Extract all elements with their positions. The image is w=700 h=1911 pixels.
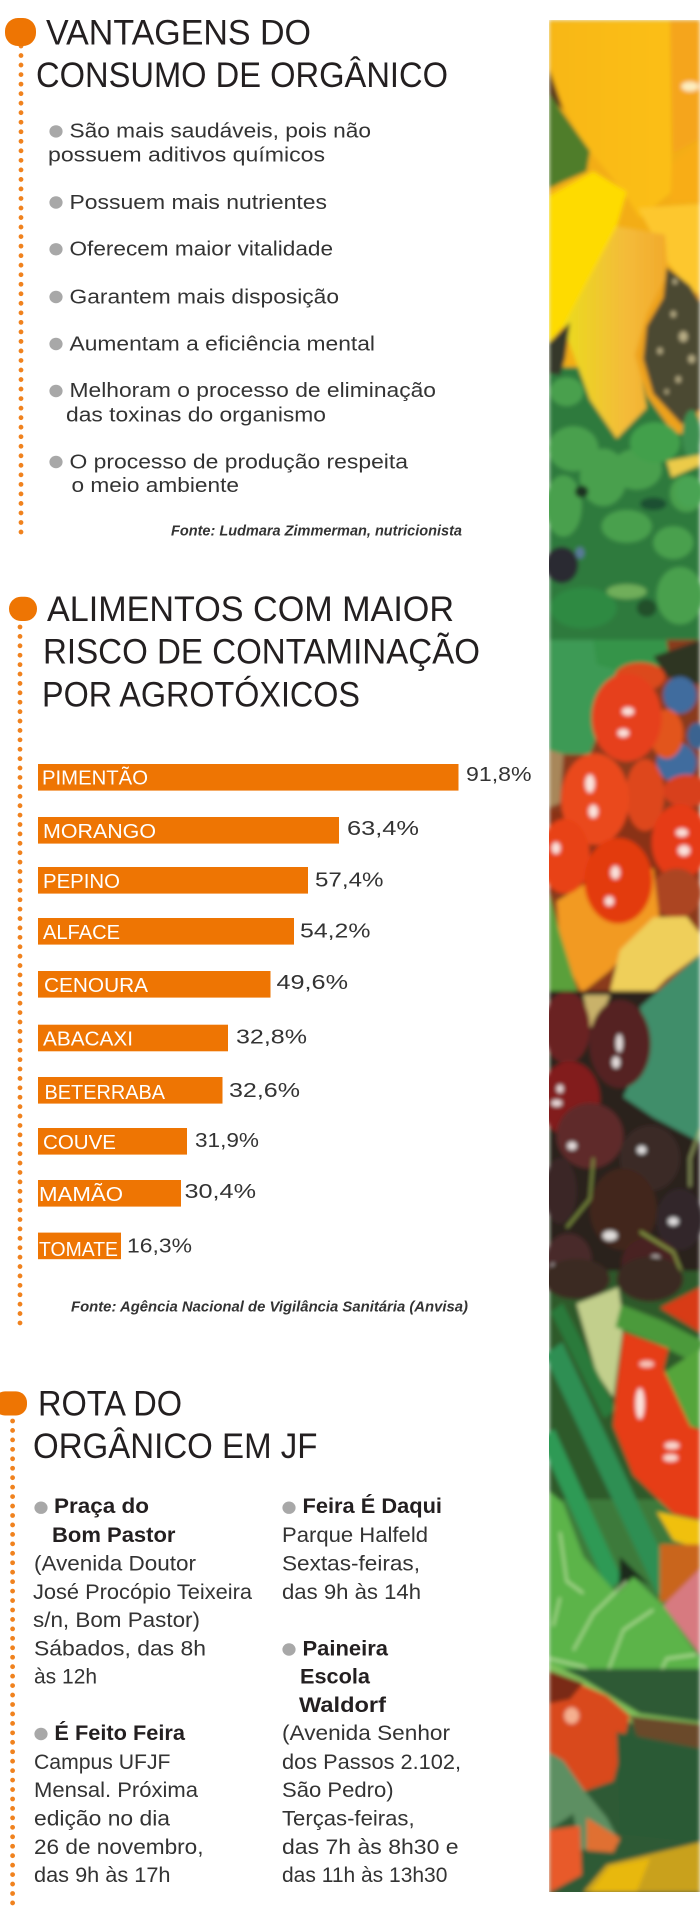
location: praça do bom pastor: s/n, Bom Pastor) xyxy=(33,1609,200,1632)
location: paineira escola waldorf xyxy=(282,1637,461,1887)
bullet list of advantages: Aumentam a eficiência mental xyxy=(70,333,375,356)
section: alimentos com maior risco de contaminação xyxy=(9,590,532,1326)
bar: cenoura: 49,6% xyxy=(276,972,348,994)
bar: couve: COUVE xyxy=(43,1131,116,1154)
bar: pepino xyxy=(38,867,384,894)
location: é feito feira: das 9h às 17h xyxy=(34,1864,171,1887)
bar: morango xyxy=(38,817,419,844)
orange blob marker xyxy=(5,18,36,46)
orange blob marker xyxy=(9,597,37,621)
bar: pimentão: 91,8% xyxy=(466,764,532,786)
bullet list of advantages: Possuem mais nutrientes xyxy=(70,191,327,214)
bar: couve xyxy=(38,1128,259,1155)
location: paineira escola waldorf: Terças-feiras, xyxy=(282,1808,415,1830)
location: paineira escola waldorf: Paineira xyxy=(302,1637,388,1660)
location: feira é daqui: das 9h às 14h xyxy=(282,1581,421,1604)
location: paineira escola waldorf: Escola xyxy=(300,1666,370,1689)
bar: beterraba xyxy=(38,1077,300,1104)
heading: CONSUMO DE ORGÂNICO xyxy=(36,56,448,95)
bullet list of advantages: Oferecem maior vitalidade xyxy=(70,237,333,260)
heading: ORGÂNICO EM JF xyxy=(33,1427,318,1466)
location: é feito feira: Mensal. Próxima xyxy=(34,1779,198,1802)
bar chart xyxy=(38,764,532,1261)
location: praça do bom pastor: Praça do xyxy=(54,1495,149,1518)
location: é feito feira: É Feito Feira xyxy=(54,1722,185,1745)
bullet list of advantages: São mais saudáveis, pois não xyxy=(70,120,371,142)
source note: Fonte: Ludmara Zimmerman, nutricionista xyxy=(171,523,462,540)
heading: POR AGROTÓXICOS xyxy=(42,676,360,715)
heading: ALIMENTOS COM MAIOR xyxy=(47,590,454,629)
bullet list of advantages: das toxinas do organismo xyxy=(66,403,326,426)
location: é feito feira: edição no dia xyxy=(34,1808,170,1830)
bar: morango: MORANGO xyxy=(43,820,156,843)
photo: fruits and vegetables column xyxy=(540,20,700,1897)
heading xyxy=(33,1384,318,1466)
heading xyxy=(36,14,448,95)
bar: abacaxi: ABACAXI xyxy=(43,1028,133,1050)
orange blob marker xyxy=(0,1391,27,1416)
location: praça do bom pastor xyxy=(33,1495,252,1689)
bar: cenoura xyxy=(38,971,348,998)
location: paineira escola waldorf: São Pedro) xyxy=(282,1779,394,1802)
location: praça do bom pastor: Bom Pastor xyxy=(52,1524,176,1547)
location: feira é daqui: Parque Halfeld xyxy=(282,1524,428,1547)
bar: tomate: 16,3% xyxy=(127,1236,192,1258)
location: paineira escola waldorf: dos Passos 2.102, xyxy=(282,1751,461,1774)
location: praça do bom pastor: (Avenida Doutor xyxy=(34,1552,196,1576)
bar: mamão: MAMÃO xyxy=(39,1183,123,1206)
dotted line xyxy=(10,1421,15,1908)
source note: Fonte: Agência Nacional de Vigilância Sanitária (Anvisa) xyxy=(71,1299,468,1316)
location: é feito feira xyxy=(34,1722,204,1887)
bar: cenoura: CENOURA xyxy=(44,974,148,997)
location: praça do bom pastor: Sábados, das 8h xyxy=(34,1637,206,1660)
bullet list of advantages: o meio ambiente xyxy=(72,474,239,497)
location: é feito feira: Campus UFJF xyxy=(34,1751,170,1774)
bullet list of advantages: Melhoram o processo de eliminação xyxy=(70,379,436,402)
bullet list of advantages: Garantem mais disposição xyxy=(70,286,339,309)
heading: ROTA DO xyxy=(38,1384,182,1424)
bar: abacaxi: 32,8% xyxy=(236,1027,307,1049)
section: vantagens do consumo de orgânico xyxy=(5,14,462,540)
heading: VANTAGENS DO xyxy=(46,14,311,53)
bar: beterraba: BETERRABA xyxy=(44,1081,165,1104)
bar: alface: 54,2% xyxy=(300,920,371,942)
dotted line xyxy=(18,627,22,1326)
location: paineira escola waldorf: das 11h às 13h30 xyxy=(282,1864,447,1887)
heading xyxy=(42,590,480,715)
bar: tomate xyxy=(38,1233,192,1261)
location: é feito feira: 26 de novembro, xyxy=(34,1836,204,1859)
heading: RISCO DE CONTAMINAÇÃO xyxy=(43,632,480,672)
location: feira é daqui: Feira É Daqui xyxy=(302,1495,442,1518)
dotted line xyxy=(19,46,23,535)
location: feira é daqui: Sextas-feiras, xyxy=(282,1552,420,1576)
bar: pimentão xyxy=(38,764,532,791)
bar: mamão: 30,4% xyxy=(184,1181,256,1203)
bar: couve: 31,9% xyxy=(195,1130,259,1152)
location: praça do bom pastor: às 12h xyxy=(34,1666,97,1689)
bar: beterraba: 32,6% xyxy=(229,1080,300,1102)
location: paineira escola waldorf: das 7h às 8h30 e xyxy=(282,1836,459,1859)
bar: mamão xyxy=(38,1180,256,1207)
location: paineira escola waldorf: (Avenida Senhor xyxy=(282,1722,450,1745)
bullet list of advantages: O processo de produção respeita xyxy=(70,451,409,474)
bar: abacaxi xyxy=(38,1025,307,1051)
bar: alface xyxy=(38,918,371,945)
location: feira é daqui xyxy=(282,1495,442,1604)
bar: pepino: PEPINO xyxy=(43,870,120,893)
location: praça do bom pastor: José Procópio Teixeira xyxy=(33,1581,252,1604)
section: rota do orgânico em jf xyxy=(0,1384,461,1908)
bar: alface: ALFACE xyxy=(43,921,120,944)
bullet list of advantages: possuem aditivos químicos xyxy=(48,143,325,166)
bar: pimentão: PIMENTÃO xyxy=(42,767,148,790)
bullet list of advantages xyxy=(48,120,436,497)
bar: tomate: TOMATE xyxy=(39,1238,118,1261)
bar: morango: 63,4% xyxy=(347,818,419,840)
bar: pepino: 57,4% xyxy=(315,870,384,892)
location: paineira escola waldorf: Waldorf xyxy=(299,1694,387,1717)
